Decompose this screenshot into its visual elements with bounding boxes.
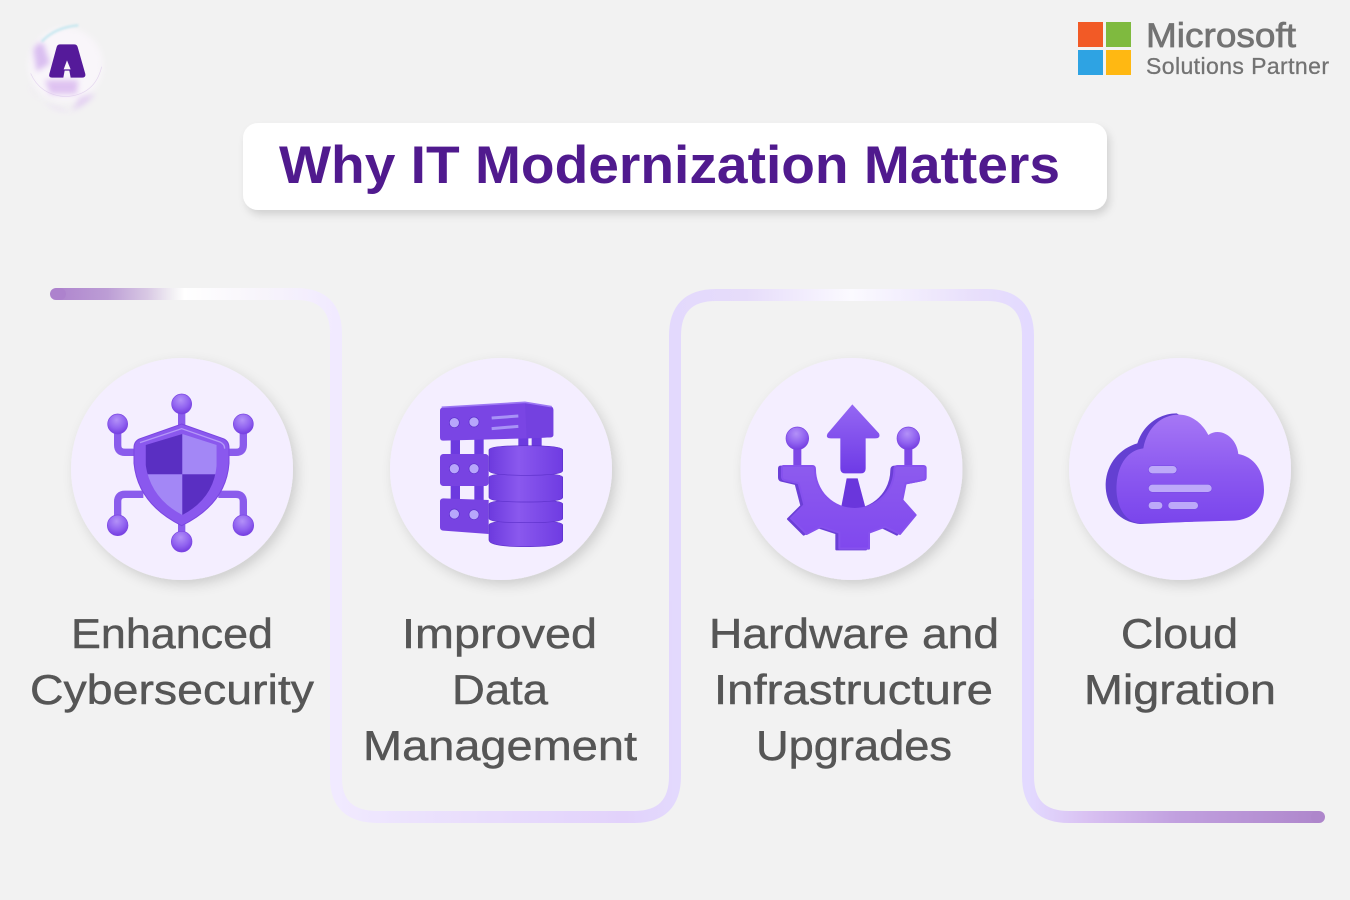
panel: hardware and infrastructure upgrades bbox=[709, 358, 999, 769]
label: Enhanced Cybersecurity: Cybersecurity bbox=[30, 666, 314, 713]
label: Improved Data Management: Management bbox=[363, 722, 637, 769]
label: Hardware and Infrastructure Upgrades: Hardware and bbox=[709, 610, 999, 657]
icon: cloud bbox=[1106, 413, 1264, 524]
label: Improved Data Management: Data bbox=[452, 666, 549, 713]
logo: Microsoft Solutions Partner: Solutions Partner bbox=[1146, 53, 1329, 79]
logo letter A bbox=[49, 44, 85, 78]
icon: shield network bbox=[107, 394, 254, 552]
icon: gear with upward arrow bbox=[779, 404, 926, 549]
label: Enhanced Cybersecurity: Enhanced bbox=[71, 610, 273, 657]
panel: cloud migration bbox=[1069, 358, 1291, 713]
logo: A bubble bbox=[28, 25, 103, 112]
connector line bbox=[56, 294, 1319, 817]
label: Cloud Migration bbox=[1084, 610, 1276, 713]
panel: improved data management bbox=[363, 358, 637, 769]
label: Hardware and Infrastructure Upgrades bbox=[709, 610, 999, 769]
label: Hardware and Infrastructure Upgrades: Upgrades bbox=[756, 722, 952, 769]
title card bbox=[243, 123, 1107, 210]
label: Enhanced Cybersecurity bbox=[30, 610, 314, 713]
icon: server and database bbox=[440, 402, 563, 547]
label: Cloud Migration: Cloud bbox=[1121, 610, 1238, 657]
title card: Why IT Modernization Matters bbox=[279, 136, 1060, 195]
label: Improved Data Management bbox=[363, 610, 637, 769]
logo: Microsoft Solutions Partner bbox=[1078, 17, 1329, 79]
logo: Microsoft Solutions Partner: Microsoft bbox=[1146, 17, 1297, 55]
panel: enhanced cybersecurity bbox=[30, 358, 314, 713]
label: Improved Data Management: Improved bbox=[402, 610, 597, 657]
label: Hardware and Infrastructure Upgrades: Infrastructure bbox=[714, 666, 993, 713]
label: Cloud Migration: Migration bbox=[1084, 666, 1276, 713]
